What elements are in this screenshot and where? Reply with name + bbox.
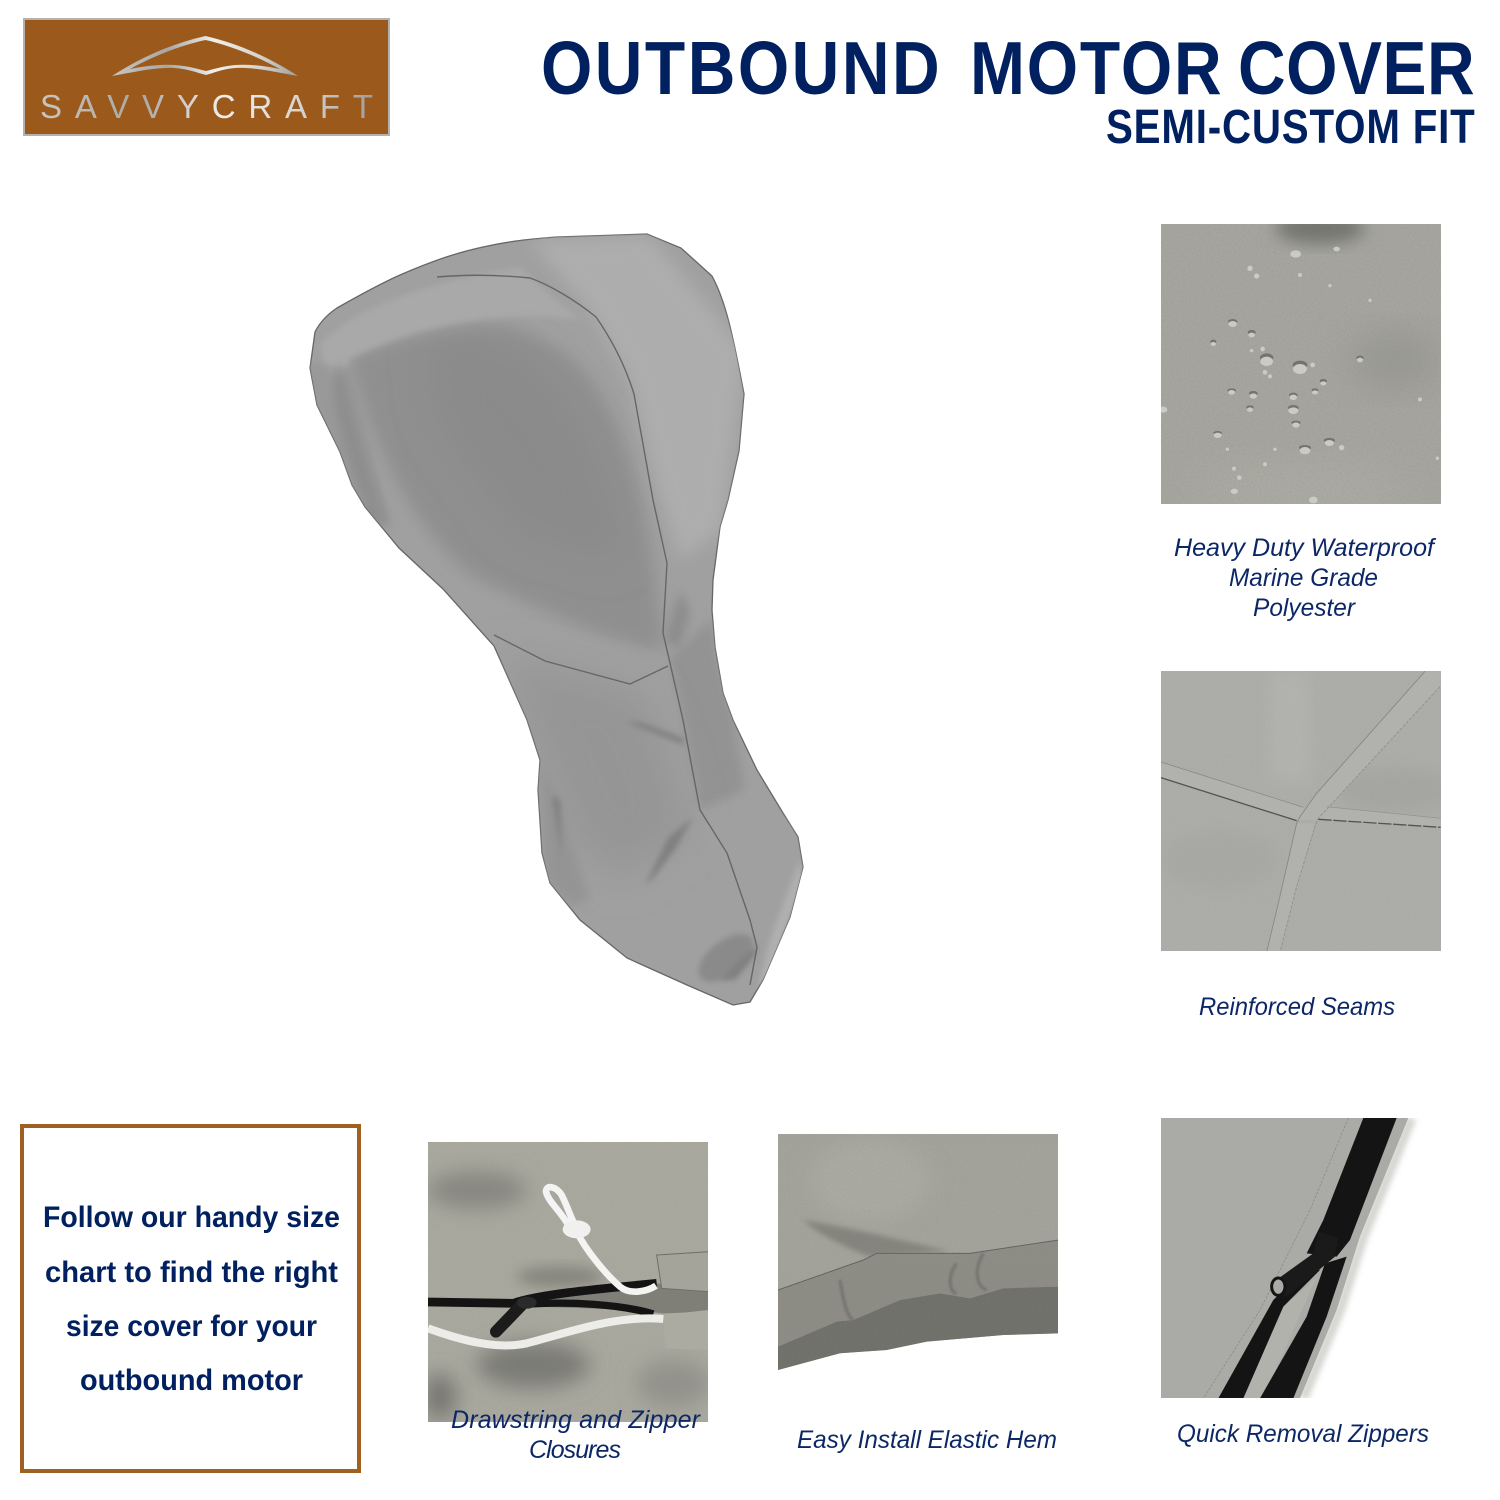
- cover seams: [437, 275, 757, 985]
- seam stitching: [1160, 671, 1441, 952]
- zipper pull: [496, 1305, 522, 1332]
- upper white drawstring: [577, 1232, 656, 1292]
- hem underside: [778, 1287, 1059, 1370]
- title: OUTBOUND: [541, 26, 940, 110]
- photo: reinforced seams: [1160, 671, 1455, 952]
- callout: size chart advice: chart to find the right: [45, 1256, 338, 1289]
- caption: waterproof polyester: Heavy Duty Waterproof: [1174, 534, 1437, 562]
- photo: waterproof polyester with droplets: [1159, 212, 1441, 514]
- caption: waterproof polyester: Marine Grade: [1229, 564, 1378, 592]
- title: COVER: [1238, 26, 1475, 110]
- water droplets: [1159, 247, 1439, 503]
- title: [541, 26, 1475, 110]
- caption: reinforced seams: Reinforced Seams: [1199, 993, 1395, 1021]
- fabric creases: [552, 722, 757, 980]
- soft shadow at fabric edge: [1303, 1118, 1412, 1398]
- photo: elastic hem: [778, 1134, 1059, 1374]
- zipper fabric tabs: [657, 1252, 709, 1292]
- photo: quick removal zippers: [1160, 1118, 1412, 1398]
- title: MOTOR: [970, 26, 1222, 110]
- hem gather: [778, 1240, 1059, 1347]
- callout: size chart advice: [22, 1126, 359, 1471]
- callout: size chart advice: size cover for your: [66, 1310, 317, 1343]
- callout: size chart advice: outbound motor: [80, 1364, 303, 1397]
- caption: quick removal zippers: Quick Removal Zippers: [1177, 1420, 1429, 1448]
- caption: drawstring and zipper closures: [451, 1406, 702, 1464]
- logo: Savvycraft: [24, 19, 389, 135]
- logo roof mark: [112, 36, 298, 76]
- zipper opening: [533, 1283, 709, 1313]
- logo wordmark: SAVVYCRAFT: [40, 88, 373, 125]
- callout: size chart advice: Follow our handy size: [43, 1201, 340, 1234]
- caption: waterproof polyester: Polyester: [1253, 594, 1357, 622]
- zipper slider: [1280, 1254, 1335, 1287]
- caption: waterproof polyester: [1174, 534, 1437, 622]
- caption: elastic hem: Easy Install Elastic Hem: [797, 1426, 1057, 1454]
- zipper teeth: [428, 1283, 657, 1303]
- caption: drawstring and zipper closures: Drawstring and Zipper: [451, 1406, 702, 1434]
- caption: drawstring and zipper closures: Closures: [529, 1436, 621, 1464]
- fabric panel and flap: [1160, 1118, 1408, 1398]
- black zipper: [1307, 1118, 1397, 1257]
- lower white cord: [428, 1318, 663, 1345]
- photo: drawstring and zipper closures: [423, 1142, 710, 1422]
- main product image: grey outboard motor cover: [300, 234, 803, 1005]
- subtitle: SEMI-CUSTOM FIT: [1106, 101, 1475, 154]
